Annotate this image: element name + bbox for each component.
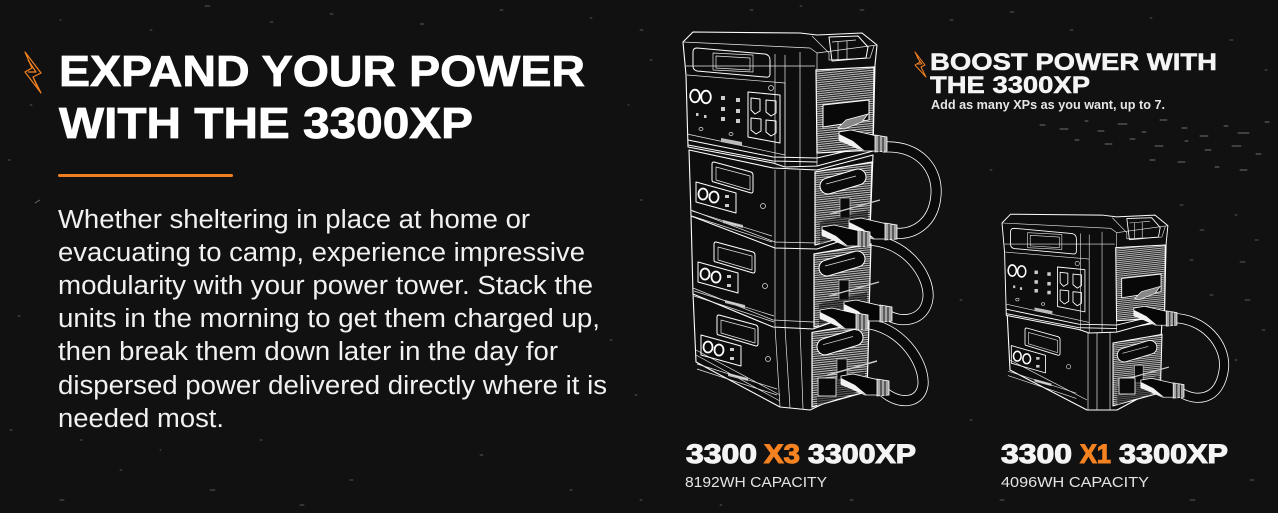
body text: modularity with your power tower. Stack the <box>58 272 593 300</box>
body text: needed most. <box>58 405 224 433</box>
connectors: small stack <box>1134 306 1184 398</box>
body text <box>58 206 607 433</box>
cable: small stack <box>1172 318 1224 398</box>
label: 3300 X1 3300XP <box>1001 439 1228 469</box>
label: 3300 X1 3300XP: 3300XP <box>1119 439 1228 469</box>
body text: evacuating to camp, experience impressive <box>58 239 585 267</box>
body text: Whether sheltering in place at home or <box>58 206 531 234</box>
product illustration: two-unit stack <box>1002 214 1224 410</box>
upper unit <box>1002 214 1168 333</box>
module 4 <box>693 293 877 410</box>
top unit <box>683 32 877 167</box>
connectors: stack <box>820 130 897 396</box>
boost heading <box>930 49 1217 99</box>
body text: dispersed power delivered directly where it is <box>58 372 607 400</box>
boost subheading: Add as many XPs as you want, up to 7. <box>931 98 1165 112</box>
cables: stack <box>862 147 936 401</box>
divider <box>58 174 233 177</box>
label: 3300 X3 3300XP: X3 <box>764 439 800 469</box>
body text: units in the morning to get them charged up, <box>58 305 600 333</box>
module 2 <box>689 150 880 249</box>
title: EXPAND YOUR POWER <box>59 47 585 96</box>
label: 3300 X1 3300XP: X1 <box>1080 439 1111 469</box>
label: 3300 X3 3300XP <box>686 439 916 469</box>
product illustration: four-unit stack <box>683 32 936 410</box>
capacity: 8192Wh: 8192WH CAPACITY <box>685 474 827 491</box>
body text: then break them down later in the day for <box>58 338 559 366</box>
lower unit <box>1007 310 1169 410</box>
title <box>59 47 585 148</box>
icon: orange bolt, boost heading <box>915 52 926 77</box>
label: 3300 X1 3300XP: 3300 <box>1001 439 1072 469</box>
capacity: 4096Wh: 4096WH CAPACITY <box>1001 474 1149 491</box>
module 3 <box>691 215 879 329</box>
label: 3300 X3 3300XP: 3300XP <box>808 439 916 469</box>
icon: orange bolt, main heading <box>25 52 41 93</box>
title: WITH THE 3300XP <box>59 99 473 148</box>
boost heading: BOOST POWER WITH <box>930 49 1217 76</box>
label: 3300 X3 3300XP: 3300 <box>686 439 757 469</box>
boost heading: THE 3300XP <box>930 72 1090 99</box>
